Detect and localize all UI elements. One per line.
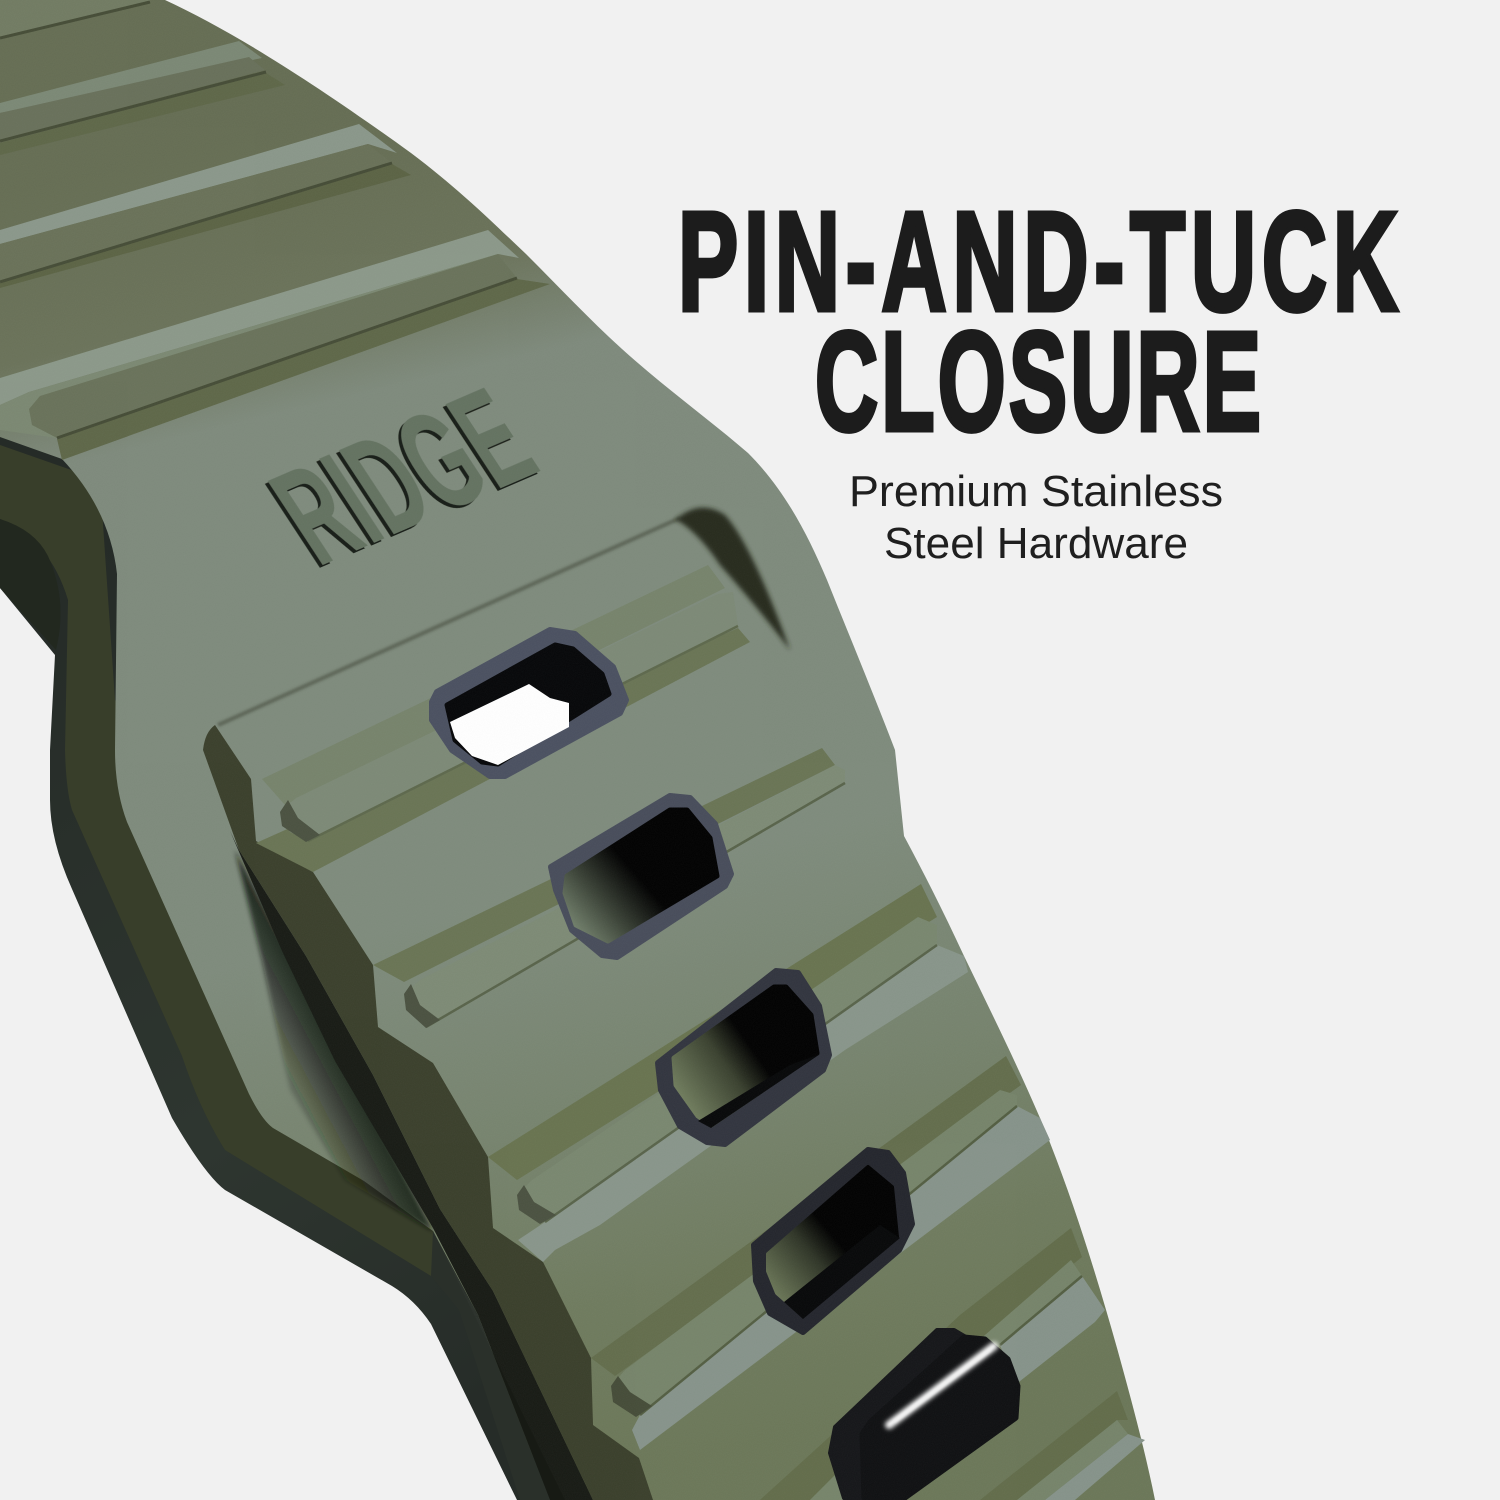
keeper rib 5 [760, 1228, 1105, 1500]
band mid side wall [0, 445, 600, 1500]
title line 1: PIN-AND-TUCK [678, 184, 1404, 341]
keeper rib 1 [256, 565, 750, 872]
stepped side face of keeper [203, 725, 653, 1500]
steel pin [830, 1330, 1018, 1498]
inner dark gap [0, 519, 60, 650]
subtitle [849, 467, 1223, 568]
keeper rib 4 [591, 1056, 1050, 1450]
band top surface [0, 0, 1155, 1500]
keeper recess shadow [675, 508, 790, 650]
upper rib C [0, 124, 411, 288]
dark crease between layers [230, 831, 593, 1500]
upper rib A [0, 0, 150, 38]
hole 1 with see-through opening [432, 630, 626, 776]
upper rib B [0, 41, 285, 155]
keeper rib 6 [980, 1391, 1145, 1500]
keeper recess line [218, 518, 680, 725]
tab shadow [235, 850, 433, 1231]
watch band illustration [0, 0, 1155, 1500]
lower side strip [431, 1231, 550, 1500]
surface grain [215, 409, 1018, 1500]
band underside silhouette [0, 0, 1130, 1500]
title line 2: CLOSURE [815, 303, 1264, 460]
upper rib D [0, 230, 550, 460]
subtitle line 1: Premium Stainless [849, 467, 1223, 516]
hole 2 [551, 796, 731, 957]
keeper rib 2 [373, 748, 845, 1028]
hole 3 [658, 971, 829, 1144]
keeper rib 3 [488, 884, 968, 1262]
title [678, 184, 1404, 460]
hole 4 [754, 1150, 912, 1332]
RIDGE embossed logo: RIDGE [245, 359, 560, 593]
subtitle line 2: Steel Hardware [884, 519, 1188, 568]
